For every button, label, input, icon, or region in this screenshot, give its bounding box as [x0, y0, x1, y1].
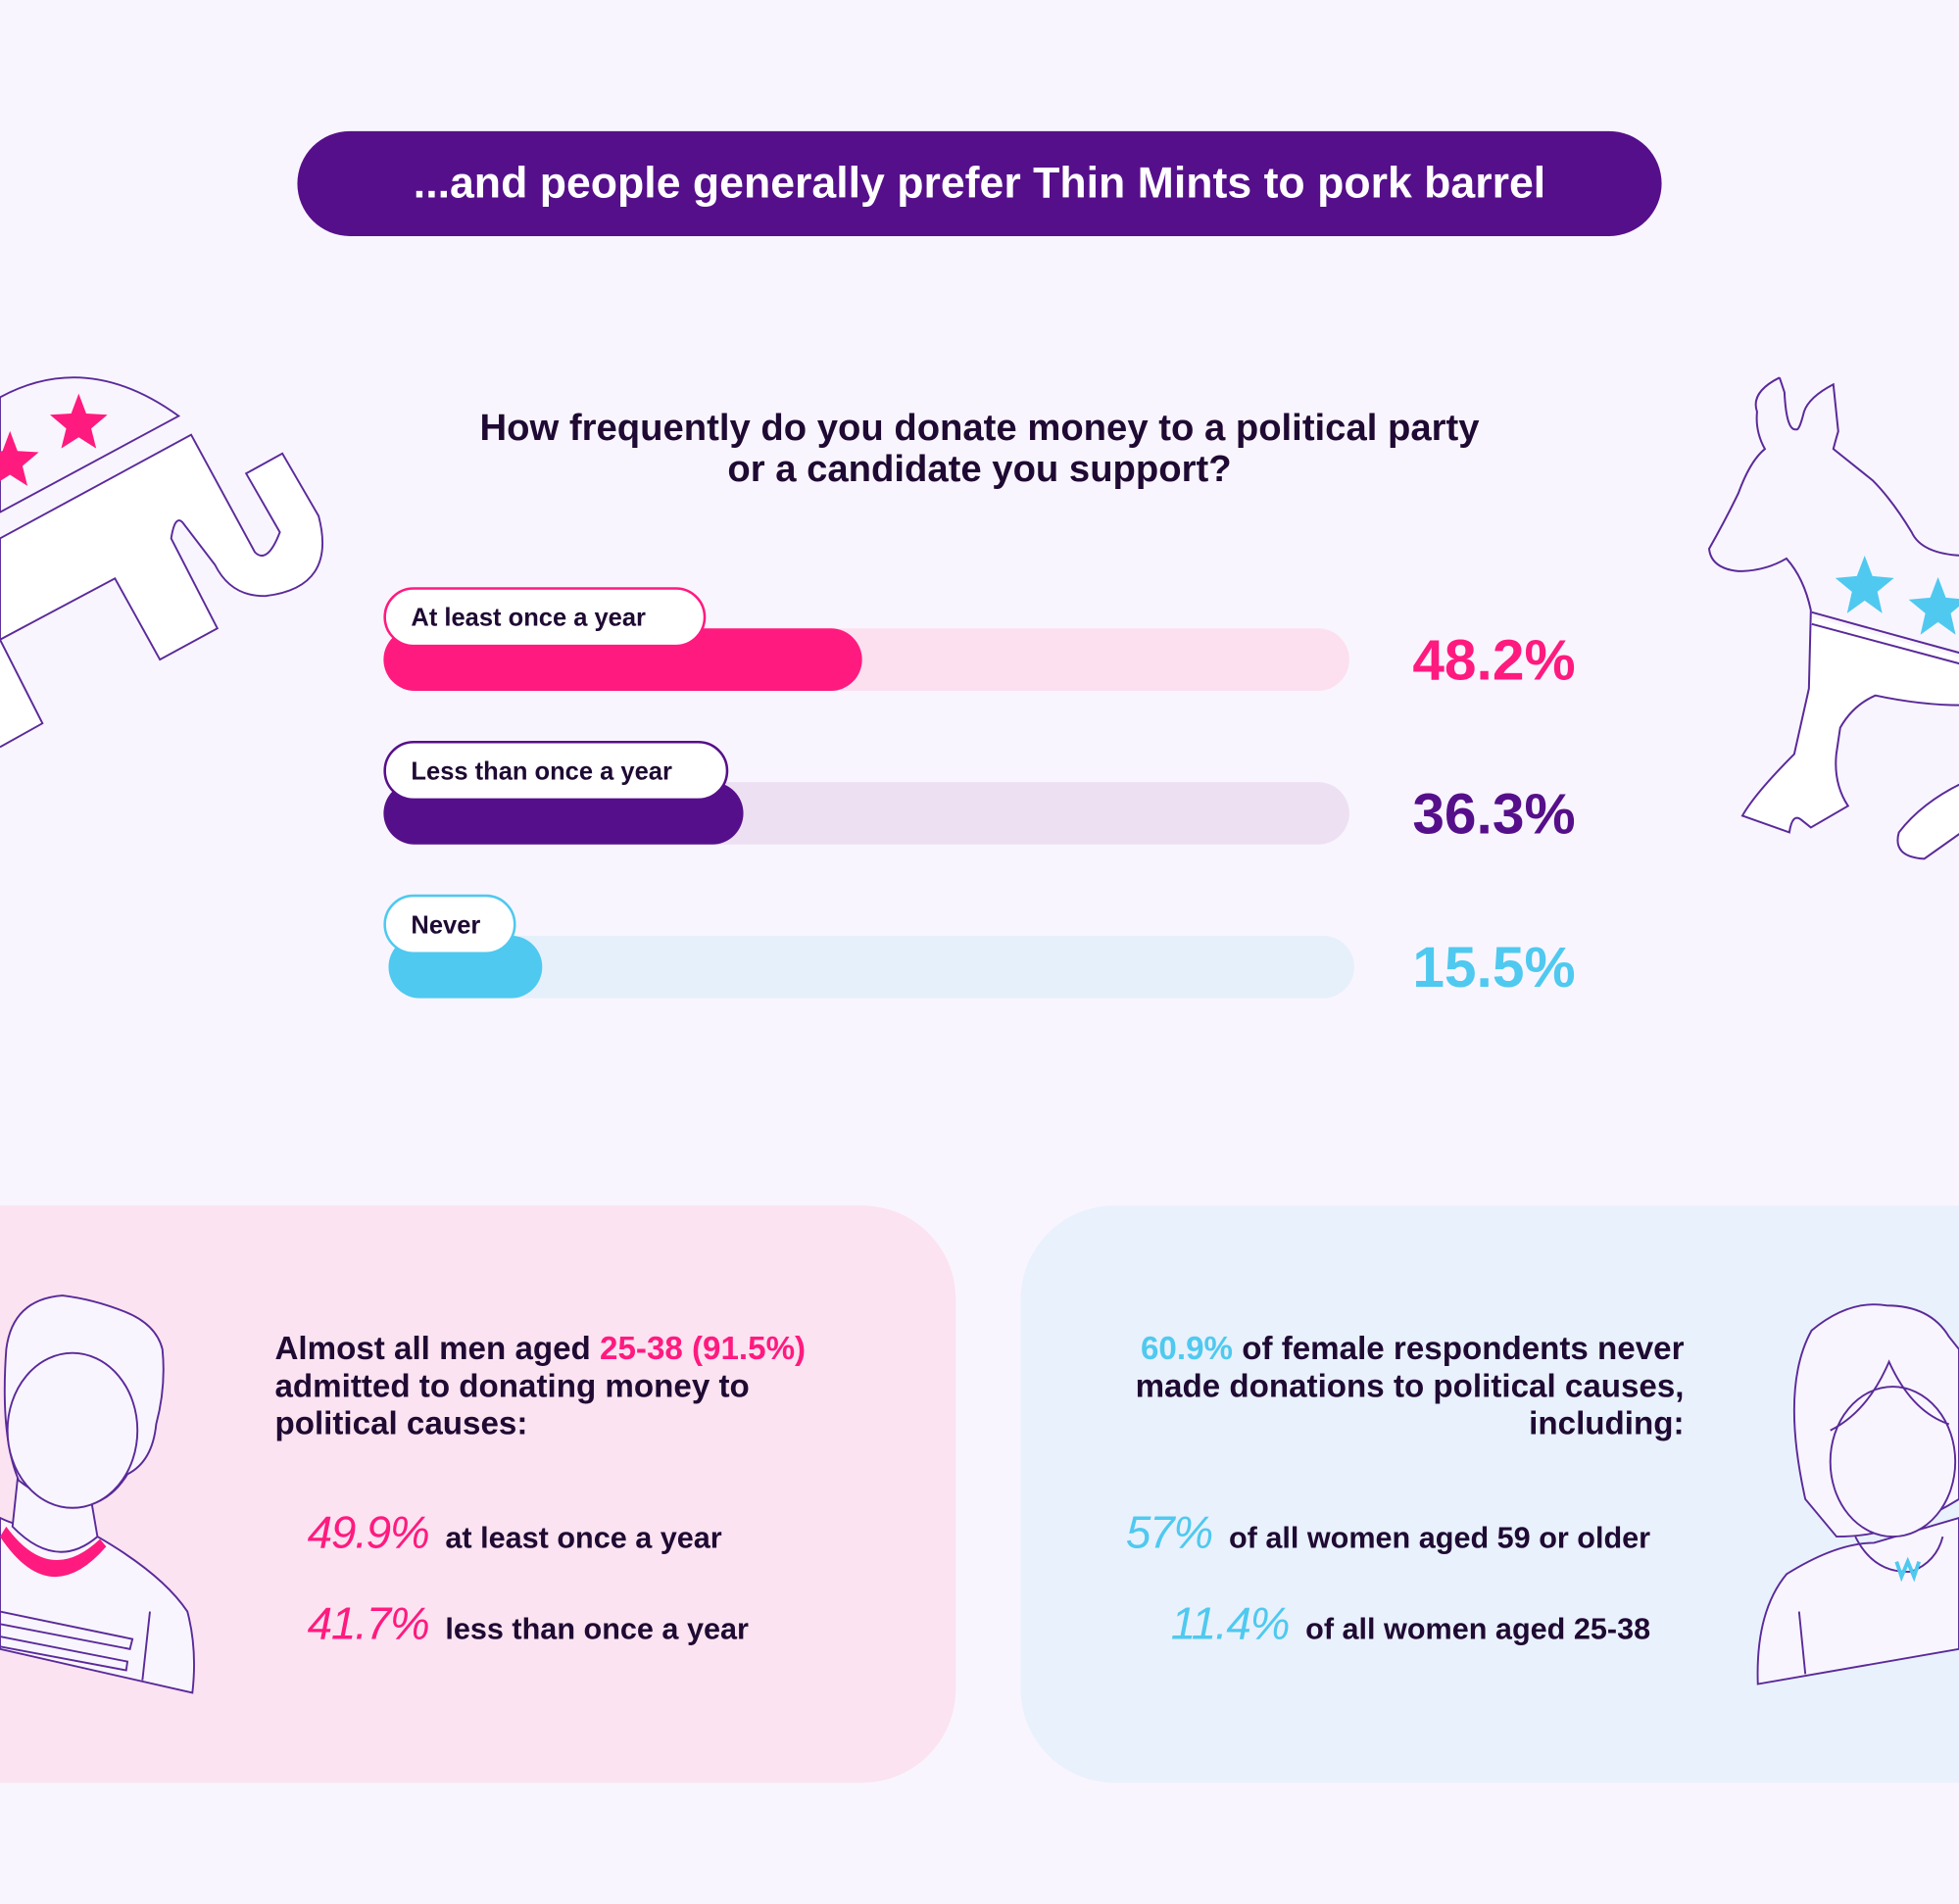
stat: men at least once a year: 49.9% at least once a year — [308, 1506, 722, 1558]
label: never: Never — [411, 912, 480, 940]
stat: men less than once a year: 41.7% less than once a year — [308, 1598, 749, 1649]
label: never — [383, 895, 516, 954]
text block: men summary: admitted to donating money to — [274, 1367, 750, 1404]
label: at least once a year — [383, 587, 706, 647]
question heading: or a candidate you support? — [727, 449, 1232, 490]
stat: women 25-38: 11.4% of all women aged 25-38 — [1171, 1598, 1650, 1649]
text block: men summary — [274, 1329, 806, 1441]
label: at least once a year: At least once a year — [411, 605, 646, 632]
label: less than once a year — [383, 741, 728, 801]
text block: women summary: made donations to political causes, — [1136, 1367, 1685, 1404]
bar: at least once a year — [383, 628, 1349, 691]
title banner: ...and people generally prefer Thin Mints to pork barrel — [414, 159, 1545, 208]
icon: woman — [1756, 1303, 1959, 1685]
text block: women summary — [1136, 1329, 1685, 1441]
text block: women summary: including: — [1529, 1404, 1685, 1441]
text block: women summary: 60.9% of female respondents never — [1141, 1329, 1685, 1367]
icon: donkey — [1708, 376, 1959, 860]
question heading — [479, 408, 1480, 490]
bar chart — [383, 587, 1576, 1000]
text block: men summary: Almost all men aged 25-38 (91.5%) — [274, 1329, 806, 1367]
value: 15.5%: 15.5% — [1412, 935, 1576, 1000]
panel: pink men panel — [0, 1205, 955, 1782]
bar: less than once a year — [383, 782, 1349, 845]
stat: women 59 or older: 57% of all women aged 59 or older — [1126, 1506, 1650, 1558]
value: 36.3%: 36.3% — [1412, 781, 1576, 846]
icon: elephant — [0, 376, 323, 749]
label: less than once a year: Less than once a year — [411, 758, 672, 786]
text block: men summary: political causes: — [274, 1404, 527, 1441]
icon: man — [0, 1294, 195, 1694]
question heading: How frequently do you donate money to a political party — [479, 408, 1480, 449]
title banner — [297, 131, 1662, 236]
value: 48.2%: 48.2% — [1412, 627, 1576, 692]
panel: blue women panel — [1021, 1205, 1959, 1782]
bar: never — [388, 936, 1354, 999]
